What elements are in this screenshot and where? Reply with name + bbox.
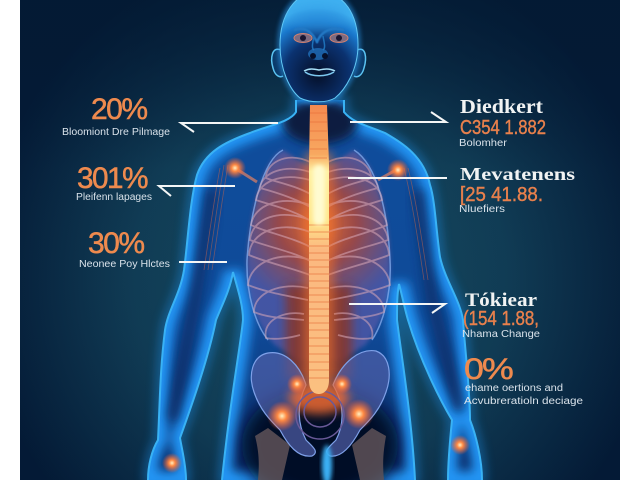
right stat 2: [25 41.88. (460, 184, 543, 206)
left stat 2: Pleifenn lapages (76, 192, 152, 203)
right femur (352, 428, 386, 480)
brow and nose bridge highlight (294, 29, 344, 42)
left stat 3: Neonee Poy Hlctes (79, 259, 170, 270)
pointer: right bottom (349, 304, 445, 313)
left iliac wing (251, 353, 315, 456)
left stat 1: 20% (91, 93, 147, 126)
left hip (267, 401, 297, 431)
right pupil (336, 35, 342, 41)
human body figure (148, 100, 482, 480)
right stat 4: Acvubreratioln deciage (464, 396, 584, 407)
skull and face (280, 0, 358, 102)
mouth (304, 69, 335, 76)
right sacral joint (332, 374, 352, 394)
vertebral column (309, 105, 329, 394)
right stat 1: C354 1.882 (460, 117, 546, 139)
right stat 1: Bolomher (459, 138, 508, 149)
left stat 2: 301% (77, 162, 148, 195)
right wrist (450, 435, 470, 455)
right stat 2 (459, 164, 575, 215)
lower back glow (286, 285, 352, 380)
left pupil (300, 35, 306, 41)
pointer: left bottom (179, 261, 227, 263)
right stat 4: 0% (464, 353, 513, 386)
forehead highlight (288, 6, 348, 30)
pointer: right middle (348, 177, 447, 179)
right stat 3: Nhama Change (462, 329, 540, 340)
left stat 3: 30% (88, 227, 144, 260)
groin blue glow (322, 445, 332, 480)
bright core (313, 165, 325, 225)
spine (304, 105, 334, 394)
right stat 2: Nluefiers (459, 204, 505, 215)
rib cage (238, 150, 396, 380)
vertebrae segments (309, 113, 329, 378)
right hip (344, 399, 374, 429)
torso and arms (148, 100, 482, 480)
left eye (294, 34, 312, 42)
left femur (255, 428, 290, 480)
cage outline (247, 150, 390, 340)
right ear (354, 49, 366, 77)
right eye (330, 34, 348, 42)
dark neck and shoulder shading (282, 100, 358, 144)
left stat 3 (79, 227, 170, 270)
dark pelvis shading (242, 387, 398, 480)
pointer: left top (181, 123, 278, 132)
dark arm shading left (172, 190, 212, 420)
pointer: right top (350, 112, 446, 122)
left stat 1 (62, 93, 170, 138)
right iliac wing (327, 351, 389, 456)
body outer glow (148, 100, 482, 480)
right stat 3 (462, 290, 540, 340)
pelvis (251, 351, 389, 480)
nose (308, 36, 328, 60)
head (272, 0, 366, 102)
left shoulder (224, 157, 246, 179)
left ribs (248, 158, 312, 339)
left stat 1: Bloomiont Dre Pilmage (62, 127, 170, 138)
pointer lines (159, 112, 447, 313)
pelvic inlet rings (296, 391, 344, 439)
spine glow (304, 150, 334, 390)
right stat 1 (459, 96, 546, 149)
pelvic basin glow (289, 382, 349, 414)
dark arm shading right (418, 190, 460, 410)
right shoulder (387, 159, 409, 181)
head glow (280, 0, 358, 102)
right stat 1: Diedkert (460, 96, 543, 118)
arm tendons (204, 165, 428, 280)
pointer: left middle (159, 186, 235, 196)
left sacral joint (287, 374, 307, 394)
inner rim light (148, 100, 482, 480)
right stat 2: Mevatenens (460, 164, 575, 184)
left wrist (162, 453, 182, 473)
right stat 3: (154 1.88, (463, 308, 539, 330)
right stat 3: Tókiear (465, 290, 538, 311)
right stat 4: ehame oertions and (465, 383, 563, 394)
glowing joints (162, 157, 470, 473)
collarbone to shoulder links (238, 170, 396, 182)
body outline (148, 100, 482, 480)
right ribs (326, 158, 390, 339)
left ear (272, 49, 283, 77)
right stat 4 (464, 353, 584, 407)
chest glow (247, 150, 390, 360)
